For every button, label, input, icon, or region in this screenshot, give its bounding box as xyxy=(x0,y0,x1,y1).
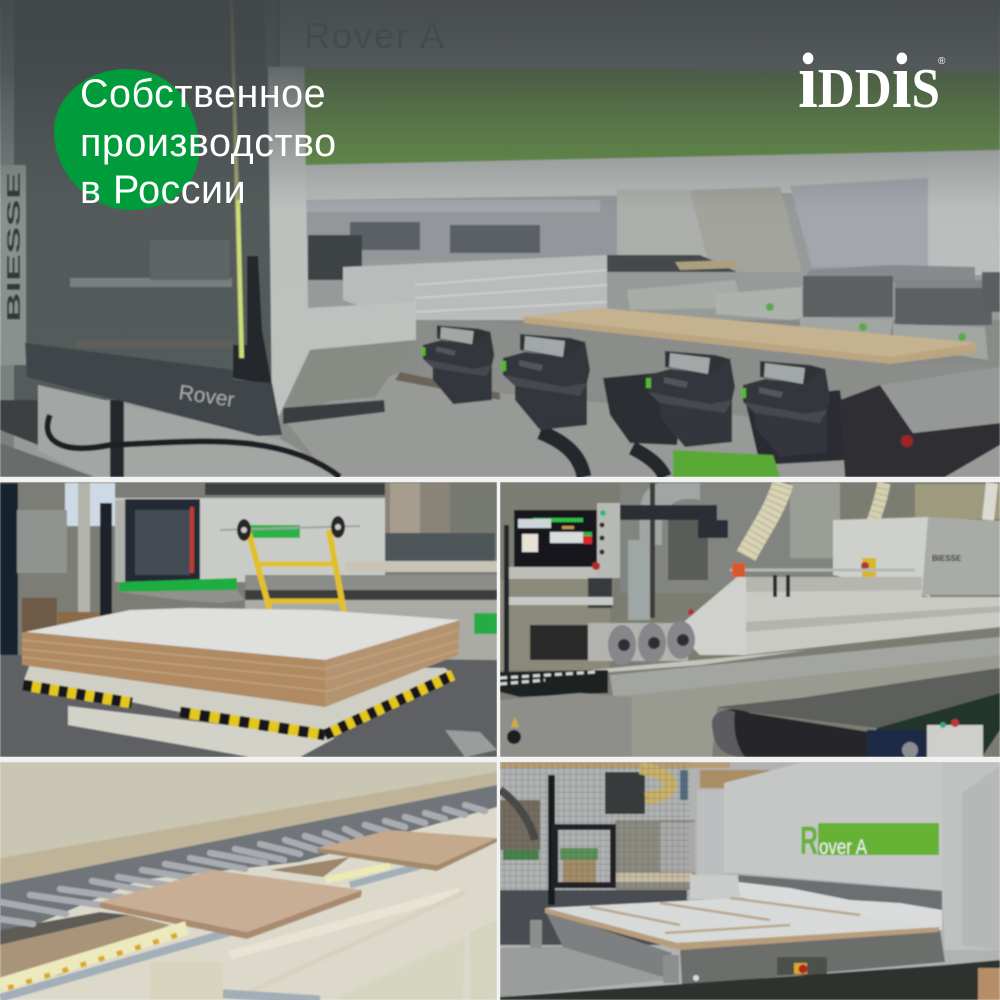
machine casing xyxy=(724,763,1000,950)
red stop button xyxy=(901,435,913,447)
green Rover A label xyxy=(800,819,939,863)
green machine base xyxy=(119,578,237,592)
title: производство xyxy=(80,121,337,165)
comb strip xyxy=(0,785,497,940)
yellow-green light strip xyxy=(230,0,244,358)
title xyxy=(80,72,337,212)
black hoses xyxy=(540,432,584,477)
green machine base xyxy=(673,450,780,477)
green machine band xyxy=(305,68,1000,165)
hazard stripes xyxy=(23,675,453,735)
panel: top photo of Rover A machine: Rover xyxy=(177,381,236,412)
lift base xyxy=(68,706,335,757)
panel: wood boards in feed system xyxy=(0,762,497,1000)
black post and frame xyxy=(548,775,613,905)
left column and glass door xyxy=(0,0,280,450)
operator screen xyxy=(514,510,597,567)
right table and machine xyxy=(245,575,497,660)
machine head xyxy=(833,517,1000,597)
panel: top photo of Rover A machine xyxy=(0,0,1000,477)
dark base xyxy=(0,912,130,945)
gray pods and boxes xyxy=(627,265,1000,360)
white door frame xyxy=(268,67,416,416)
ladder wheels and axle xyxy=(220,516,360,541)
gray frame prism xyxy=(290,340,415,405)
panel: edge banding machine xyxy=(500,482,1000,757)
machine body xyxy=(115,498,385,582)
yellow ladder xyxy=(248,530,344,612)
table top xyxy=(545,898,940,950)
pale wall beneath band xyxy=(305,150,1000,280)
logo: IDDIS: ® xyxy=(938,56,946,67)
angled metal cover xyxy=(880,367,1000,433)
floor xyxy=(500,945,667,997)
cream cabinets xyxy=(150,920,497,1000)
orange bar xyxy=(730,563,915,577)
brown gap xyxy=(0,915,170,985)
machine body xyxy=(685,575,1000,655)
wooden board xyxy=(524,308,978,364)
black post xyxy=(100,503,112,619)
floor xyxy=(0,655,497,757)
corner wood stack xyxy=(978,968,1000,1000)
bottom dark rail xyxy=(500,960,1000,1000)
ducting xyxy=(628,483,708,620)
green machine label xyxy=(240,525,300,538)
table side and front xyxy=(530,910,945,985)
control column and arm xyxy=(504,503,728,685)
panel: board stack on lift table xyxy=(0,482,497,757)
rollers xyxy=(530,621,695,665)
black door post xyxy=(233,256,272,385)
background window and wall xyxy=(65,483,115,526)
rail and lower rods xyxy=(0,866,465,1000)
folded curtain xyxy=(738,875,942,930)
lower left floor and cables xyxy=(0,385,345,477)
title: Собственное xyxy=(80,72,326,116)
lower machine housing xyxy=(615,652,1000,757)
green circle xyxy=(54,69,199,210)
panel: Rover A cutting machine xyxy=(500,762,1000,1000)
panel stack xyxy=(343,255,607,326)
faint Rover A lettering: Rover A xyxy=(304,15,446,56)
infeed roller belt xyxy=(500,670,608,697)
tan lip xyxy=(0,772,497,884)
machine head: BIESSE xyxy=(932,554,962,563)
dark upper shading xyxy=(0,0,1000,477)
board two xyxy=(317,830,497,871)
yellow roller strip xyxy=(0,866,390,988)
lift plate xyxy=(24,664,453,735)
metal rail and table xyxy=(590,637,1000,697)
green Rover A label: over A xyxy=(819,836,867,859)
beige flexible hoses xyxy=(746,483,992,566)
machine bed and floor xyxy=(280,320,1000,477)
wood stack xyxy=(22,608,460,707)
title: в России xyxy=(80,168,246,212)
electrical cabinet xyxy=(17,510,67,573)
conveyor xyxy=(712,668,1000,758)
logo: IDDIS: iDDiS xyxy=(798,37,940,124)
metal pins xyxy=(0,805,485,924)
back side panels xyxy=(697,790,727,875)
green Rover A label: R xyxy=(800,819,818,863)
machine upper casing xyxy=(270,0,1000,72)
navy door xyxy=(0,483,18,655)
panel: top photo of Rover A machine: BIESSE xyxy=(4,172,24,322)
mesh background equipment xyxy=(500,762,770,945)
clamps xyxy=(421,325,830,457)
bottom dark frame xyxy=(25,343,385,436)
dark support blocks xyxy=(603,372,1000,477)
cream wall xyxy=(0,762,497,858)
board one xyxy=(100,870,362,939)
lower housing xyxy=(500,693,632,757)
